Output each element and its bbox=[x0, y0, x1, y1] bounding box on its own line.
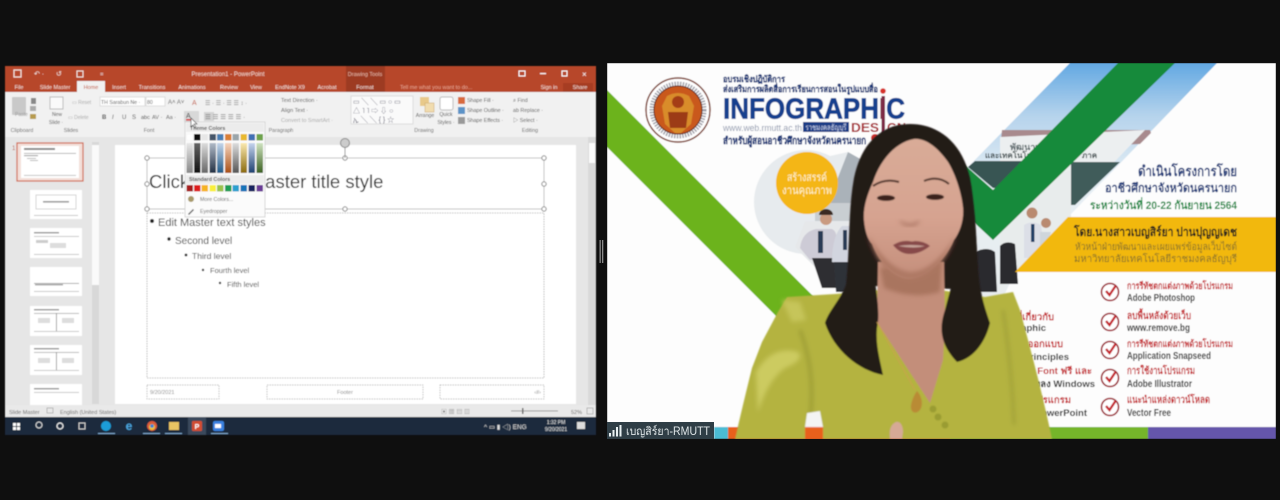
header text block bbox=[722, 74, 906, 148]
nose bbox=[899, 220, 920, 226]
main title: INFOGRAPHIC bbox=[723, 94, 905, 126]
ribbon: TH Sarabun Ne · bbox=[101, 100, 140, 106]
title bar: Acrobat bbox=[318, 85, 337, 91]
ribbon: U bbox=[122, 115, 126, 121]
right hair lock bbox=[940, 210, 991, 363]
organiser text: ระหว่างวันที่ 20-22 กันยายน 2564 bbox=[1090, 197, 1238, 212]
title bar: Tell me what you want to do... bbox=[400, 85, 473, 91]
ribbon: A bbox=[186, 113, 191, 120]
ribbon: New bbox=[52, 112, 62, 118]
title bar: Sign in bbox=[541, 85, 557, 91]
ribbon: Shape Outline · bbox=[467, 108, 504, 114]
ribbon: Shape Fill · bbox=[467, 98, 494, 104]
ribbon: S bbox=[132, 115, 136, 121]
panel: presenter video with poster background bbox=[607, 63, 1276, 439]
participant name tag: เบญสิร์ยา-RMUTT bbox=[626, 424, 710, 438]
title bar: = bbox=[100, 72, 104, 78]
font color dropdown: Standard Colors bbox=[189, 177, 230, 183]
item 5: Vector Free bbox=[1127, 408, 1171, 419]
footer placeholders: 9/20/2021 bbox=[150, 390, 174, 396]
ribbon: ▷ Select · bbox=[513, 118, 538, 124]
title bar: Home bbox=[84, 85, 98, 91]
ribbon: Align Text · bbox=[281, 108, 308, 114]
item 3 bbox=[1102, 338, 1233, 362]
item 3: การรีทัชตกแต่งภาพด้วยโปรแกรม bbox=[1127, 338, 1233, 350]
necklace bbox=[877, 322, 922, 413]
body placeholder bbox=[147, 213, 544, 378]
yellow speaker banner: มหาวิทยาลัยเทคโนโลยีราชมงคลธัญบุรี bbox=[1074, 252, 1238, 265]
topic list: left column, partly hidden: PowerPoint bbox=[1035, 408, 1088, 419]
title bar: ↶ · bbox=[34, 71, 44, 78]
body placeholder: Fifth level bbox=[227, 280, 259, 289]
dark green check mark bbox=[950, 63, 1175, 240]
ribbon: ☰ · ☰ · ☰ ☰ ↕ · bbox=[205, 100, 247, 107]
ribbon: ⌕ Find bbox=[513, 98, 528, 104]
ribbon: △ ˥ ˥ ⇨ ⇩ ○ bbox=[353, 106, 393, 115]
poster bbox=[607, 63, 1276, 439]
item 2 bbox=[1102, 308, 1191, 334]
footer placeholders: ‹#› bbox=[534, 390, 541, 396]
topic list: left column, partly hidden: ที่เกี่ยวกับ bbox=[1016, 309, 1054, 323]
body placeholder: Fourth level bbox=[210, 266, 250, 275]
item 1 bbox=[1102, 280, 1233, 304]
item 3: Application Snapseed bbox=[1127, 351, 1211, 362]
item 4: การใช้งานโปรแกรม bbox=[1127, 364, 1195, 377]
title bar: File bbox=[15, 85, 23, 91]
ribbon: ▭ Delete bbox=[68, 115, 89, 121]
title placeholder bbox=[145, 138, 546, 211]
students in building photo bbox=[975, 208, 1051, 292]
blouse shading bbox=[756, 300, 1014, 425]
eyes and brows bbox=[873, 179, 949, 201]
header text block: www.web.rmutt.ac.th bbox=[722, 123, 802, 133]
topic list: left column, partly hidden bbox=[1020, 310, 1096, 417]
title bar: View bbox=[250, 85, 262, 91]
font color dropdown: Eyedropper bbox=[200, 209, 228, 215]
header text block: ราชมงคลธัญบุรี bbox=[806, 123, 847, 132]
right scrollbar bbox=[588, 137, 596, 408]
topic list: left column, partly hidden: การออกแบบ bbox=[1011, 339, 1063, 350]
ribbon: Text Direction · bbox=[281, 98, 318, 104]
ribbon: Editing bbox=[522, 128, 538, 134]
bottom colour strip bbox=[714, 427, 1276, 439]
yellow speaker banner: หัวหน้าฝ่ายพัฒนาและเผยแพร่ข้อมูลเว็บไซต์ bbox=[1075, 239, 1237, 253]
item 2: ลบพื้นหลังด้วยเว็บ bbox=[1127, 308, 1191, 322]
status bar: English (United States) bbox=[60, 410, 116, 416]
ribbon: abc bbox=[141, 115, 150, 121]
title bar: Animations bbox=[178, 85, 206, 91]
font color dropdown: Theme Colors bbox=[190, 126, 225, 132]
presenter bbox=[735, 124, 1052, 439]
ribbon: Font bbox=[144, 128, 155, 134]
slide master canvas bbox=[115, 138, 576, 404]
windows taskbar: e bbox=[126, 419, 133, 433]
ribbon: Slides bbox=[64, 128, 79, 134]
topic list: right column with check icons bbox=[1102, 280, 1233, 419]
organiser text: อาชีวศึกษาจังหวัดนครนายก bbox=[1105, 181, 1237, 195]
windows taskbar: ^ ▭ ▮ ◁) ENG bbox=[484, 423, 527, 431]
yellow speaker banner bbox=[1015, 217, 1276, 272]
yellow speaker banner: โดย.นางสาวเบญสิร์ยา ปานปุญญเดช bbox=[1073, 224, 1237, 240]
sky and building photo band bbox=[955, 63, 1217, 300]
organiser text bbox=[1090, 162, 1238, 212]
sky and building photo band: พัฒนาบุคลากร bbox=[1010, 142, 1068, 153]
header text block: DES bbox=[851, 121, 879, 135]
ribbon: Drawing bbox=[414, 128, 434, 134]
underarm gap bbox=[805, 411, 823, 439]
ribbon: ☰ ☰ ☰ ☰ ☰ · bbox=[205, 114, 245, 121]
ribbon: ab Replace · bbox=[513, 108, 543, 114]
face shading bbox=[868, 235, 956, 280]
title bar: Slide Master bbox=[40, 85, 70, 91]
footer placeholders: Footer bbox=[337, 390, 353, 396]
topic list: left column, partly hidden: Infographic bbox=[994, 323, 1046, 334]
title bar: Presentation1 - PowerPoint bbox=[191, 72, 265, 78]
yellow badge bbox=[776, 152, 838, 214]
ribbon: B bbox=[102, 115, 107, 121]
ribbon: Aa · bbox=[166, 115, 176, 121]
title bar: ↺ bbox=[56, 71, 62, 78]
ribbon: Paragraph bbox=[269, 128, 293, 134]
status bar: 52% bbox=[571, 410, 582, 416]
title bar: Insert bbox=[112, 85, 126, 91]
title bar: × bbox=[582, 70, 587, 79]
footer placeholders bbox=[147, 385, 544, 399]
body placeholder: Third level bbox=[192, 251, 231, 261]
title bar: Drawing Tools bbox=[348, 72, 382, 78]
windows taskbar: P bbox=[195, 424, 200, 431]
font color dropdown bbox=[185, 122, 265, 217]
hand bbox=[890, 422, 903, 439]
photo: circular team photo bbox=[754, 150, 880, 300]
yellow badge: สร้างสรรค์ bbox=[787, 171, 827, 184]
title placeholder: Click to edit Master title style bbox=[149, 171, 383, 192]
item 4: Adobe Illustrator bbox=[1127, 379, 1192, 390]
title bar bbox=[5, 66, 596, 92]
ribbon: ኢ ╲ ╲ { } ☆ bbox=[353, 115, 394, 124]
item 1: Adobe Photoshop bbox=[1127, 293, 1195, 304]
ribbon: Styles · bbox=[437, 120, 455, 126]
topic list: left column, partly hidden: Design Font ฟรี และ bbox=[1003, 365, 1092, 377]
light green diagonal band bbox=[607, 90, 814, 316]
left hair lock bbox=[824, 284, 884, 376]
icon: windows start bbox=[13, 423, 20, 430]
ribbon: 80 bbox=[147, 100, 153, 106]
ribbon: A˄ A˅ bbox=[168, 100, 185, 106]
header text block: GN bbox=[887, 121, 906, 135]
item 4 bbox=[1102, 364, 1195, 390]
ribbon: Arrange bbox=[416, 113, 434, 119]
ribbon: Clipboard bbox=[11, 128, 33, 134]
mouth bbox=[893, 241, 930, 254]
topic list: left column, partly hidden: ติดตั้งลง Windows bbox=[1017, 376, 1095, 390]
organiser text: ดำเนินโครงการโดย bbox=[1138, 162, 1237, 179]
neck and chest bbox=[877, 262, 945, 403]
logo: college emblem bbox=[646, 78, 710, 142]
header text block: สำหรับผู้สอนอาชีวศึกษาจังหวัดนครนายก bbox=[723, 135, 866, 148]
item 5: แนะนำแหล่งดาวน์โหลด bbox=[1127, 393, 1210, 406]
thumbnails pane: 1 bbox=[12, 146, 16, 152]
ribbon: A bbox=[192, 100, 197, 107]
status bar: Slide Master bbox=[9, 410, 40, 416]
ribbon: I bbox=[112, 115, 114, 121]
topic list: left column, partly hidden: โปรแกรม bbox=[1031, 394, 1071, 406]
ribbon: AV · bbox=[152, 115, 162, 121]
windows taskbar bbox=[5, 417, 596, 435]
ribbon: Quick bbox=[439, 112, 453, 118]
face bbox=[864, 139, 963, 279]
participant name tag bbox=[607, 422, 714, 439]
title bar: Transitions bbox=[139, 85, 166, 91]
window divider handle bbox=[600, 240, 603, 263]
font color dropdown: More Colors... bbox=[200, 197, 233, 203]
topic list: left column, partly hidden: Principles bbox=[1024, 352, 1069, 363]
title bar: Review bbox=[220, 85, 238, 91]
title bar: Share bbox=[573, 85, 587, 91]
cursor bbox=[191, 118, 197, 128]
status bar: ▣ ▦ ▤ ▥ bbox=[441, 409, 470, 416]
ribbon bbox=[5, 92, 596, 137]
item 5 bbox=[1102, 393, 1210, 419]
sky and building photo band: และเทคโนโลยี bbox=[985, 150, 1037, 160]
ribbon: Convert to SmartArt · bbox=[281, 118, 333, 124]
ribbon: Slide · bbox=[49, 120, 63, 126]
sky and building photo band: ภาค bbox=[1082, 151, 1097, 160]
windows taskbar: 1:32 PM bbox=[547, 420, 565, 426]
ribbon: Shape Effects · bbox=[467, 118, 503, 124]
body placeholder: Second level bbox=[175, 236, 232, 247]
windows taskbar: 9/20/2021 bbox=[545, 427, 567, 433]
back hair bbox=[846, 124, 980, 290]
title bar: Format bbox=[356, 85, 374, 91]
header text block: อบรมเชิงปฏิบัติการ bbox=[723, 74, 785, 84]
header text block: ส่งเสริมการผลิตสื่อการเรียนการสอนในรูปแบบสื่อ bbox=[723, 82, 878, 95]
yellow badge: งานคุณภาพ bbox=[782, 185, 832, 197]
title bar: EndNote X9 bbox=[275, 85, 305, 91]
ribbon: ▭ Reset bbox=[72, 100, 92, 106]
thumbnails pane bbox=[5, 137, 99, 408]
body placeholder: Edit Master text styles bbox=[158, 217, 266, 229]
ribbon: Paste bbox=[15, 112, 28, 118]
item 1: การรีทัชตกแต่งภาพด้วยโปรแกรม bbox=[1127, 280, 1233, 292]
panel: PowerPoint screen share bbox=[5, 66, 596, 435]
blouse bbox=[735, 290, 1052, 439]
blouse buttons bbox=[930, 406, 948, 428]
people in photo bbox=[800, 208, 850, 293]
ribbon: ▭ ╲ ╲ ▭ ○ ▭ bbox=[353, 97, 401, 106]
status bar bbox=[5, 405, 596, 417]
item 2: www.remove.bg bbox=[1126, 323, 1190, 334]
